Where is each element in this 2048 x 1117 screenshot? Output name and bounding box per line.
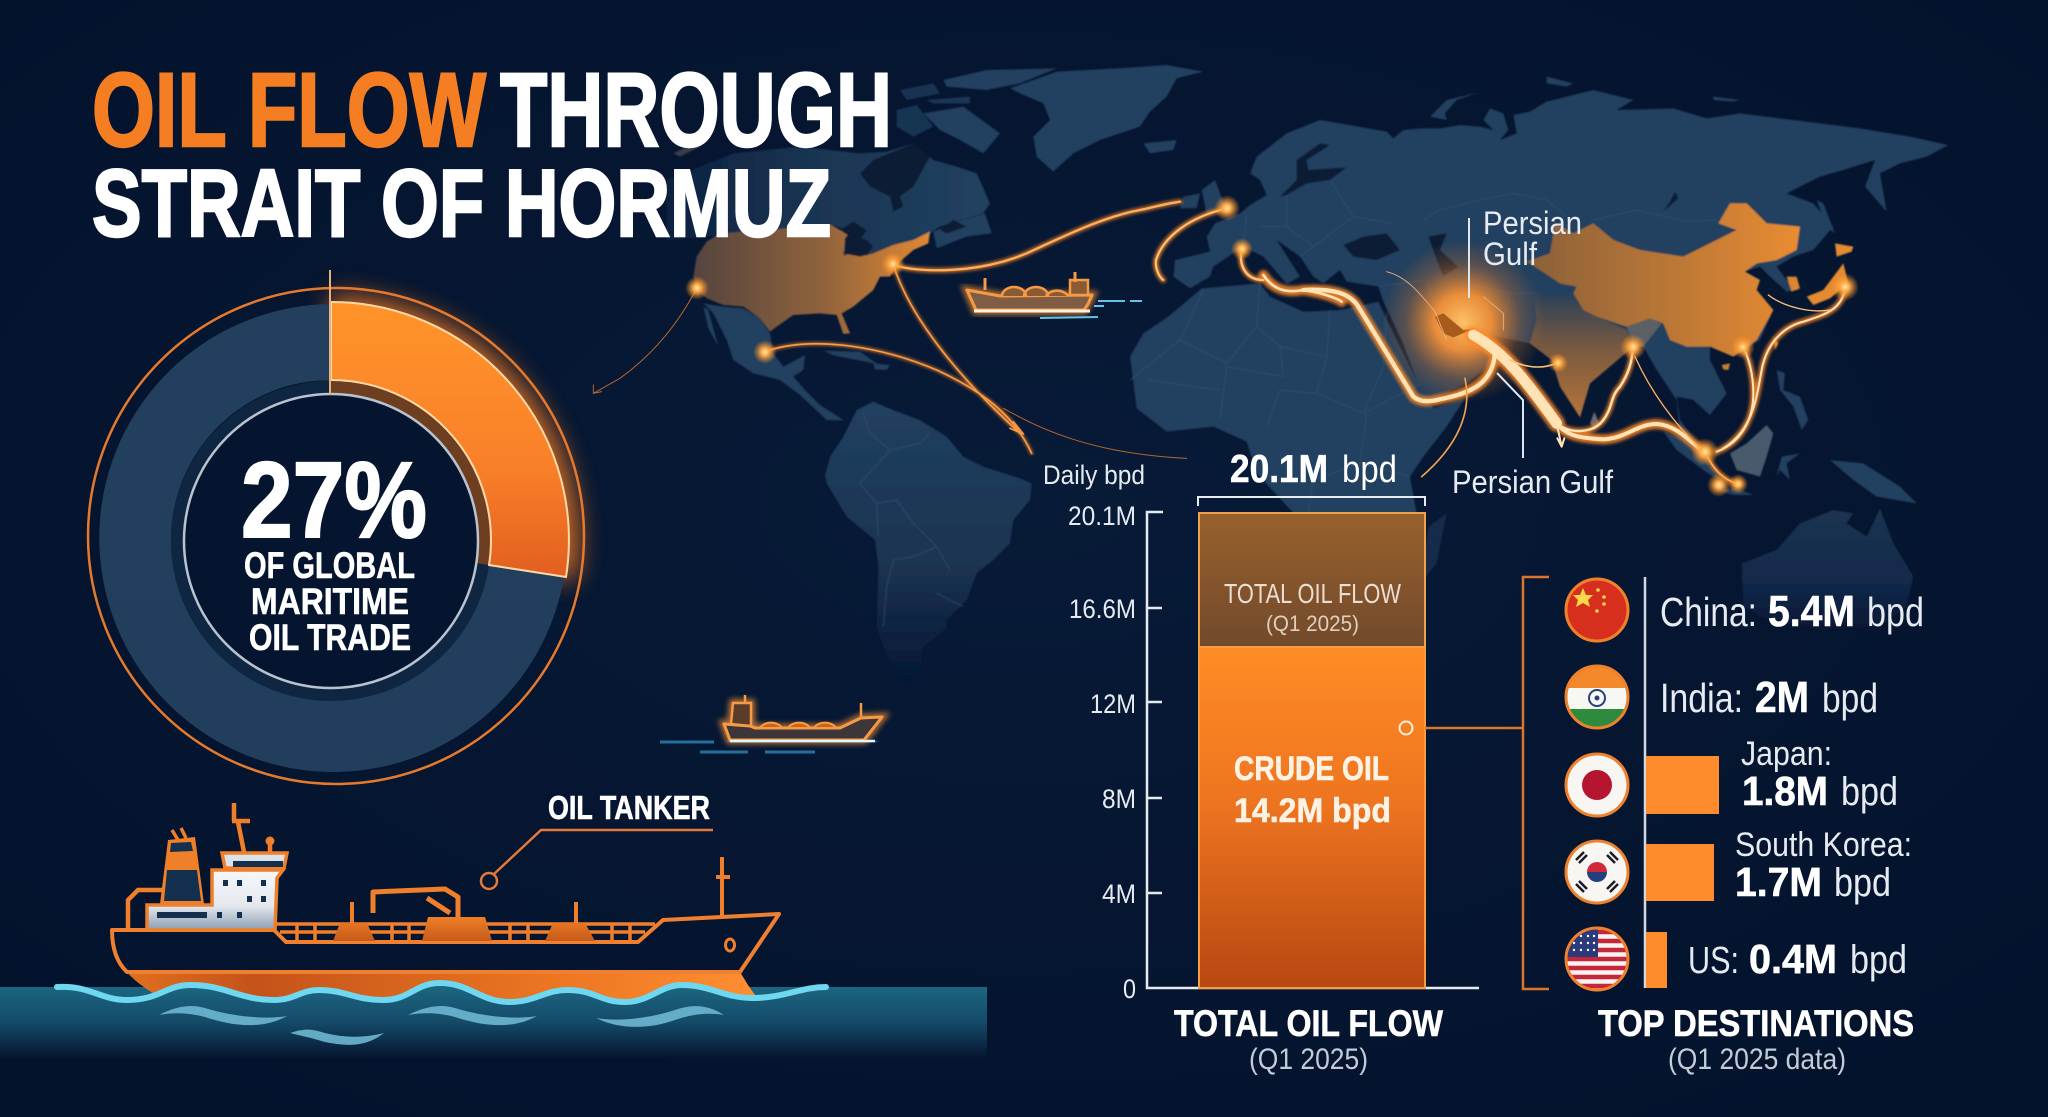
- destinations heading: TOP DESTINATIONS: [1598, 1003, 1914, 1044]
- value: India: [1660, 673, 1878, 722]
- chart: y axis: [1147, 512, 1479, 988]
- label: upper Persian Gulf: Gulf: [1483, 236, 1537, 272]
- value: India: 2M: [1755, 673, 1809, 722]
- chart: y axis labels: 16.6M: [1069, 594, 1136, 624]
- chart: y axis labels: 4M: [1102, 879, 1136, 909]
- strait glow: [1381, 240, 1545, 404]
- tanker: funnel: [160, 837, 204, 904]
- flag: United States: [1566, 928, 1628, 990]
- tanker: pipe: [128, 890, 162, 930]
- destinations axis: [1644, 577, 1646, 988]
- donut caption: [244, 545, 415, 658]
- route glow layer: [1156, 208, 1845, 484]
- flag: Japan: [1566, 754, 1628, 816]
- callout text: OIL TANKER: [548, 789, 710, 826]
- label: upper Persian Gulf: Persian: [1483, 205, 1582, 241]
- donut chart: 27% of global maritime oil trade: [88, 270, 584, 784]
- label: lower Persian Gulf: [1452, 373, 1613, 500]
- flag: South Korea: [1566, 841, 1628, 903]
- flag: India: [1566, 666, 1628, 729]
- tanker: deck rails: [275, 924, 655, 942]
- map: Australia: [1742, 508, 1913, 630]
- chart: category label: (Q1 2025): [1249, 1043, 1368, 1076]
- chart: total segment: [1199, 513, 1425, 647]
- value: India: India:: [1660, 675, 1743, 721]
- chart: total segment: (Q1 2025): [1266, 611, 1359, 636]
- callout: oil tanker: [481, 789, 713, 889]
- tanker: upper hull: [112, 914, 779, 972]
- destinations heading: [1598, 1003, 1914, 1076]
- donut: remaining share: [99, 304, 564, 772]
- label: lower Persian Gulf: Persian Gulf: [1452, 464, 1613, 500]
- donut: brown band on orange side: [331, 380, 491, 565]
- donut: 27 percent segment: [331, 302, 569, 577]
- donut: inner dark band: [171, 381, 491, 701]
- value: China: China:: [1660, 589, 1757, 635]
- map: East Asia islands: [1527, 200, 1917, 503]
- value: Japan: [1741, 735, 1898, 814]
- chart: crude oil segment: [1199, 647, 1425, 988]
- value: United States: [1688, 936, 1907, 982]
- chart: crude oil segment: CRUDE OIL: [1234, 750, 1389, 788]
- tanker: masts: [352, 857, 730, 923]
- donut: orange glow: [331, 296, 578, 580]
- value: Japan: 1.8M: [1742, 768, 1828, 814]
- connector to destinations: [1425, 577, 1549, 989]
- map: United States, Mexico and Central America: [693, 225, 930, 421]
- chart: bracket: [1198, 497, 1425, 506]
- bar chart: total oil flow: [1043, 448, 1479, 1076]
- value: China: 5.4M: [1768, 587, 1855, 636]
- tanker: radar mast: [232, 803, 270, 853]
- world map: [667, 65, 1948, 690]
- tanker: crane: [373, 889, 458, 917]
- tanker: lower hull: [127, 972, 762, 1005]
- chart: total value: bpd: [1342, 449, 1397, 491]
- value: South Korea: 1.7M: [1735, 859, 1822, 905]
- map: Eurasia and Africa: [1130, 77, 1948, 590]
- icon: small tanker mid ocean: [660, 695, 882, 752]
- route core layer: [1156, 208, 1845, 484]
- value: United States: bpd: [1850, 938, 1907, 982]
- chart: crude oil segment: 14.2M bpd: [1234, 792, 1391, 830]
- tanker: deck tanks: [333, 917, 595, 941]
- route terminal dots: [685, 195, 1859, 497]
- tanker: lower ripples: [159, 1006, 724, 1045]
- Persian Gulf outline: [1435, 313, 1475, 337]
- value: United States: US:: [1688, 940, 1739, 982]
- chart: total value: [1230, 448, 1397, 491]
- donut: tick: [329, 270, 331, 395]
- map labels: [1452, 205, 1613, 500]
- callout ring: [481, 873, 497, 889]
- chart: category label: [1174, 1003, 1443, 1076]
- value: Japan: Japan:: [1741, 735, 1832, 773]
- value: China: bpd: [1867, 589, 1924, 635]
- donut caption: MARITIME: [251, 581, 409, 622]
- route layer over the Atlantic: [593, 202, 1187, 458]
- chart: y axis labels: [1068, 501, 1136, 1004]
- title: [92, 52, 892, 257]
- icon: oil tanker: [57, 803, 826, 1045]
- chart: total value: 20.1M: [1230, 448, 1328, 491]
- map: Canada, Greenland and Arctic islands: [667, 65, 1203, 258]
- flag: China: [1566, 579, 1628, 641]
- chart: y axis labels: 12M: [1090, 689, 1136, 719]
- donut: outer ring: [88, 288, 584, 784]
- chart: link marker: [1400, 722, 1412, 734]
- value: South Korea: bpd: [1834, 861, 1891, 905]
- value: South Korea: South Korea:: [1735, 826, 1912, 864]
- title: THROUGH: THROUGH: [500, 52, 892, 169]
- tanker: porthole: [726, 939, 734, 951]
- tanker: bridge: [222, 853, 287, 868]
- destinations bars: [1646, 756, 1719, 988]
- map: South America: [825, 402, 1032, 690]
- tanker: superstructure: [147, 870, 283, 930]
- title: STRAIT OF HORMUZ: STRAIT OF HORMUZ: [92, 150, 831, 257]
- chart: y axis labels: 8M: [1102, 784, 1136, 814]
- chart: category label: TOTAL OIL FLOW: [1174, 1003, 1443, 1044]
- title: OIL FLOW: OIL FLOW: [92, 52, 486, 169]
- value: United States: 0.4M: [1749, 936, 1837, 982]
- label: upper Persian Gulf: [1469, 205, 1582, 298]
- donut value: 27%: [241, 439, 427, 560]
- icon: small tanker north Atlantic: [967, 272, 1142, 318]
- tanker: wave line: [57, 983, 826, 1002]
- chart: y axis labels: 0: [1123, 974, 1136, 1004]
- water: [0, 987, 987, 1058]
- value: Japan: bpd: [1841, 770, 1898, 814]
- donut caption: OIL TRADE: [249, 617, 411, 658]
- chart: y axis title: Daily bpd: [1043, 460, 1145, 490]
- panel: top destinations: [1566, 577, 1924, 1076]
- chart: y axis labels: 20.1M: [1068, 501, 1136, 531]
- tanker: water over hull: [57, 983, 826, 1020]
- callout leader: [494, 830, 713, 874]
- shipping routes: [593, 195, 1859, 497]
- chart: total segment: TOTAL OIL FLOW: [1224, 578, 1401, 609]
- donut: centre disc: [184, 394, 478, 688]
- donut caption: OF GLOBAL: [244, 545, 415, 586]
- value: India: bpd: [1822, 675, 1878, 721]
- destinations heading: (Q1 2025 data): [1668, 1043, 1846, 1076]
- value: China: [1660, 587, 1924, 636]
- value: South Korea: [1735, 826, 1912, 905]
